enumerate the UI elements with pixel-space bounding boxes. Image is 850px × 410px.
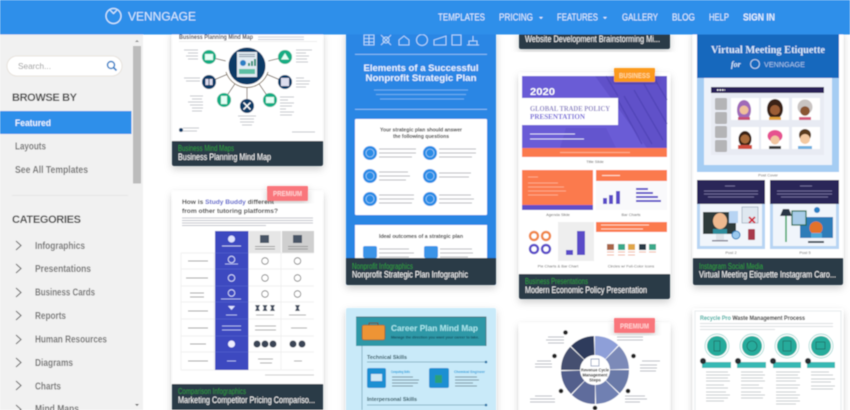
plan title: Elements of a Successful: [364, 63, 478, 73]
category list: Diagrams: [35, 358, 73, 369]
panel: ideal outcomes: [355, 225, 487, 258]
footer: economic policy: Modern Economic Policy Presentation: [525, 285, 647, 296]
comparison table: [181, 218, 314, 375]
etiquette header: [697, 30, 839, 78]
footer: nonprofit: Nonprofit Infographics: [352, 262, 413, 271]
navigation links: BLOG: [672, 12, 695, 24]
avatars: [737, 99, 812, 149]
process steps: [700, 358, 835, 404]
category list: Human Resources: [35, 334, 107, 346]
footer: website development brainstorming: Website Development Brainstorming Mi...: [525, 34, 660, 45]
footer: business planning mind map: [172, 141, 323, 166]
card: recycle pro waste management: [693, 309, 843, 410]
label: post cover: Post Cover: [758, 172, 779, 178]
tag: premium study buddy: PREMIUM: [273, 191, 302, 198]
agenda slide: [522, 170, 593, 210]
etiquette header: Virtual Meeting Etiquette: [711, 45, 826, 56]
tag: business: [614, 68, 655, 82]
process icons: [705, 334, 833, 358]
tag: business: BUSINESS: [619, 73, 650, 80]
card heading: How is Study Buddy different: [182, 199, 275, 206]
navigation links: TEMPLATES: [438, 12, 485, 24]
card: career plan mind map: Computing Skills: [391, 370, 410, 374]
post cover: [697, 78, 839, 172]
etiquette header: VENNGAGE: [764, 60, 805, 69]
footer: virtual meeting: Instagram Social Media: [699, 262, 763, 271]
recycle title: Recycle Pro Waste Management Process: [700, 315, 805, 322]
panel: ideal outcomes: Ideal outcomes of a strategic plan: [379, 234, 463, 240]
search box: Search...: [18, 61, 51, 71]
menu item: see all templates: See All Templates: [15, 165, 88, 176]
technical skills: Technical Skills: [367, 355, 407, 361]
footer: business planning mind map: Business Mind Maps: [178, 144, 234, 153]
footer: marketing competitor: Marketing Competitor Pricing Compariso...: [178, 395, 315, 406]
card: career plan mind map: [346, 308, 496, 410]
heading: categories: CATEGORIES: [12, 214, 81, 226]
heading: browse by: BROWSE BY: [12, 92, 78, 104]
labels: slide row 2: [546, 212, 641, 217]
footer: economic policy: Business Presentations: [525, 277, 588, 286]
plan title: Nonprofit Strategic Plan: [366, 73, 476, 83]
category list: Infographics: [35, 241, 85, 252]
card: marketing competitor pricing comparison: [172, 191, 323, 410]
scrollbar: [133, 34, 142, 410]
top navigation bar: [0, 0, 850, 34]
labels: slide row 3: [538, 264, 654, 268]
labels: posts: Post 2: [725, 250, 737, 255]
category list: Business Cards: [35, 288, 95, 298]
donut slide: [530, 222, 594, 261]
category list: Charts: [35, 382, 61, 392]
post illustrations: [697, 204, 839, 249]
labels: slide row 3: Pie Charts & Bar Chart: [538, 264, 579, 268]
donut centre label: Revenue Cycle: [581, 368, 610, 372]
footer: marketing competitor: [172, 384, 323, 410]
title slide: [522, 76, 667, 157]
donut: revenue cycle: [560, 335, 630, 405]
menu item: featured: [0, 111, 132, 134]
title slide: 2020: [530, 87, 555, 98]
category list: Presentations: [35, 264, 91, 275]
footer: marketing competitor: Comparison Infographics: [178, 387, 246, 396]
title slide: PRESENTATION: [530, 114, 585, 121]
interpersonal skills: Interpersonal Skills: [367, 397, 417, 403]
chapter slide: [596, 222, 667, 255]
sidebar: [0, 34, 143, 410]
card: modern economic policy presentation: [519, 73, 670, 299]
title slide: GLOBAL TRADE POLICY: [530, 106, 610, 113]
tag: premium study buddy: [267, 186, 308, 201]
search box: [7, 56, 122, 76]
mind map diagram: [179, 35, 317, 132]
footer: nonprofit: Nonprofit Strategic Plan Infographic: [352, 270, 468, 280]
career header: Career Plan Mind Map: [391, 323, 478, 333]
icon row: [364, 34, 479, 46]
card subheading: from other tutoring platforms?: [182, 208, 278, 215]
card: business planning mind map: [172, 30, 323, 166]
labels: slide row 2: Bar Charts: [621, 212, 641, 217]
footer: nonprofit: [346, 258, 496, 285]
category list: Reports: [35, 311, 66, 322]
navigation links: HELP: [709, 12, 729, 24]
navigation links: FEATURES: [557, 12, 598, 24]
donut centre label: Steps: [589, 378, 601, 382]
menu item: featured: Featured: [15, 118, 51, 129]
tag: premium revenue: PREMIUM: [620, 324, 649, 330]
tag: premium revenue: [614, 318, 655, 333]
logo: VENNGAGE: [128, 10, 196, 24]
navigation links: SIGN IN: [743, 12, 775, 24]
card: career plan mind map: Chemical Engineer: [454, 370, 485, 374]
category list: [16, 241, 107, 410]
card: virtual meeting etiquette: [693, 30, 843, 285]
panel: questions: [355, 119, 487, 215]
footer: website development brainstorming: [519, 30, 670, 49]
mind map diagram: Business Planning Mind Map: [179, 35, 253, 41]
career header: [356, 317, 486, 346]
footer: business planning mind map: Business Planning Mind Map: [178, 152, 271, 163]
panel: questions: Your strategic plan should answer: [380, 128, 462, 134]
footer: economic policy: [519, 274, 670, 299]
labels: posts: [725, 250, 811, 255]
donut centre label: [581, 368, 610, 382]
navigation links: GALLERY: [622, 12, 658, 24]
card: revenue cycle management: [519, 323, 670, 410]
plan title: [364, 63, 478, 83]
card: nonprofit strategic plan: [346, 30, 496, 285]
label: title slide: Title Slide: [586, 159, 604, 164]
labels: posts: Post 5: [799, 250, 811, 255]
bar chart slide: [596, 170, 667, 210]
career header: Manage the direction you want your career to take.: [391, 336, 479, 340]
navigation links: [438, 12, 775, 24]
etiquette header: for: [731, 60, 742, 69]
dark text panels: [697, 180, 839, 204]
labels: slide row 3: Circles w/ Full-Color Icons: [608, 264, 654, 268]
menu item: layouts: Layouts: [15, 142, 46, 152]
donut centre label: Management: [582, 372, 608, 378]
labels: slide row 2: Agenda Slide: [546, 212, 571, 217]
navigation links: PRICING: [499, 12, 533, 24]
footer: virtual meeting: [693, 258, 843, 285]
panel: questions: the following questions: [393, 134, 449, 140]
